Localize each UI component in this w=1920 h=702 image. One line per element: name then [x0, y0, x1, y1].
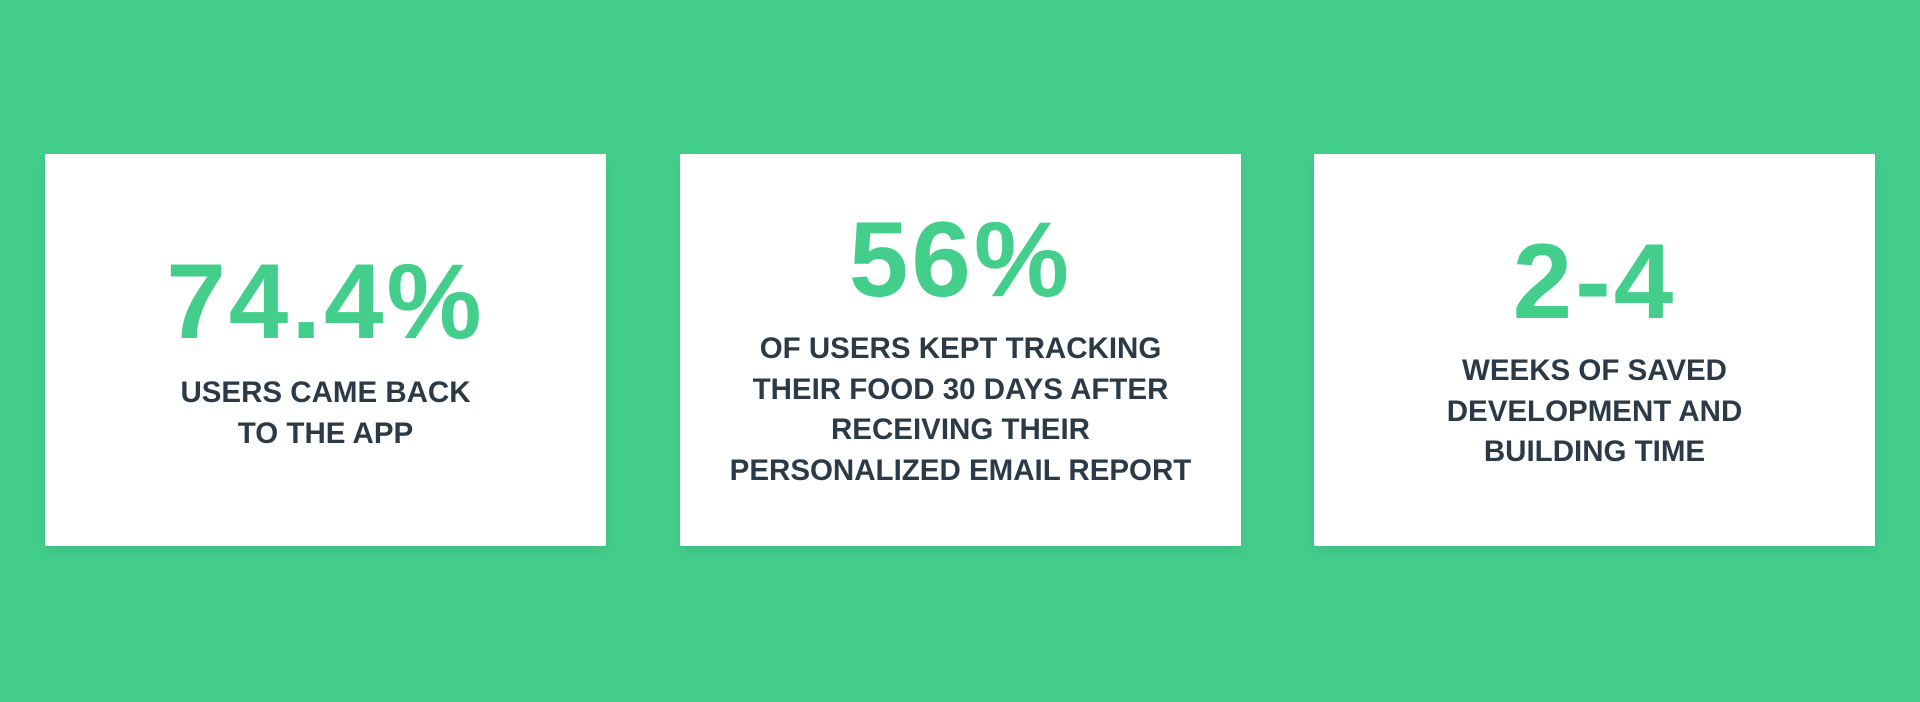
- card: saved time: [1314, 154, 1875, 546]
- stat label: weeks saved: DEVELOPMENT AND: [1447, 394, 1742, 428]
- stat label: kept tracking: THEIR FOOD 30 DAYS AFTER: [753, 372, 1168, 406]
- card: kept tracking: [680, 154, 1241, 546]
- stat label: kept tracking: PERSONALIZED EMAIL REPORT: [730, 454, 1191, 486]
- stat label: users came back: TO THE APP: [238, 416, 413, 450]
- stat label: weeks saved: [1447, 354, 1742, 468]
- stat label: weeks saved: BUILDING TIME: [1484, 435, 1705, 468]
- stat label: users came back: [180, 376, 471, 450]
- card: returning users: [45, 154, 606, 546]
- stat number: 74.4%: 74.4%: [166, 241, 485, 361]
- stat number: 2-4: 2-4: [1513, 221, 1676, 341]
- stat label: kept tracking: OF USERS KEPT TRACKING: [760, 332, 1161, 365]
- stat label: kept tracking: RECEIVING THEIR: [831, 413, 1090, 446]
- stat label: kept tracking: [730, 332, 1191, 486]
- stat number: 56%: 56%: [849, 199, 1072, 319]
- stat label: users came back: USERS CAME BACK: [180, 376, 471, 409]
- stat label: weeks saved: WEEKS OF SAVED: [1462, 354, 1727, 387]
